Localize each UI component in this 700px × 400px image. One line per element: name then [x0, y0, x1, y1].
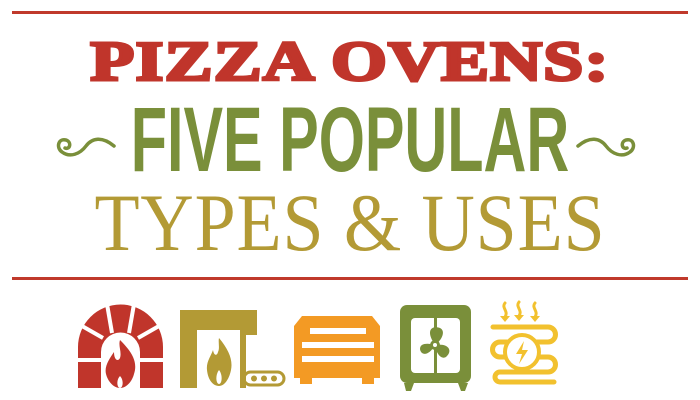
icon: brick oven — [78, 304, 163, 388]
icon: conveyor oven — [180, 310, 284, 388]
subtitle: types & uses: TYPES & USES — [94, 177, 606, 268]
subtitle: five popular: FIVE POPULAR — [131, 89, 569, 191]
icon: convection oven — [400, 305, 471, 391]
top rule — [12, 11, 688, 14]
swirl left — [56, 138, 116, 157]
icon: countertop oven — [294, 316, 380, 384]
bottom rule — [12, 277, 688, 280]
icon: electric oven — [493, 302, 556, 382]
title: pizza ovens: PIZZA OVENS: — [90, 31, 610, 93]
swirl right — [576, 138, 636, 157]
